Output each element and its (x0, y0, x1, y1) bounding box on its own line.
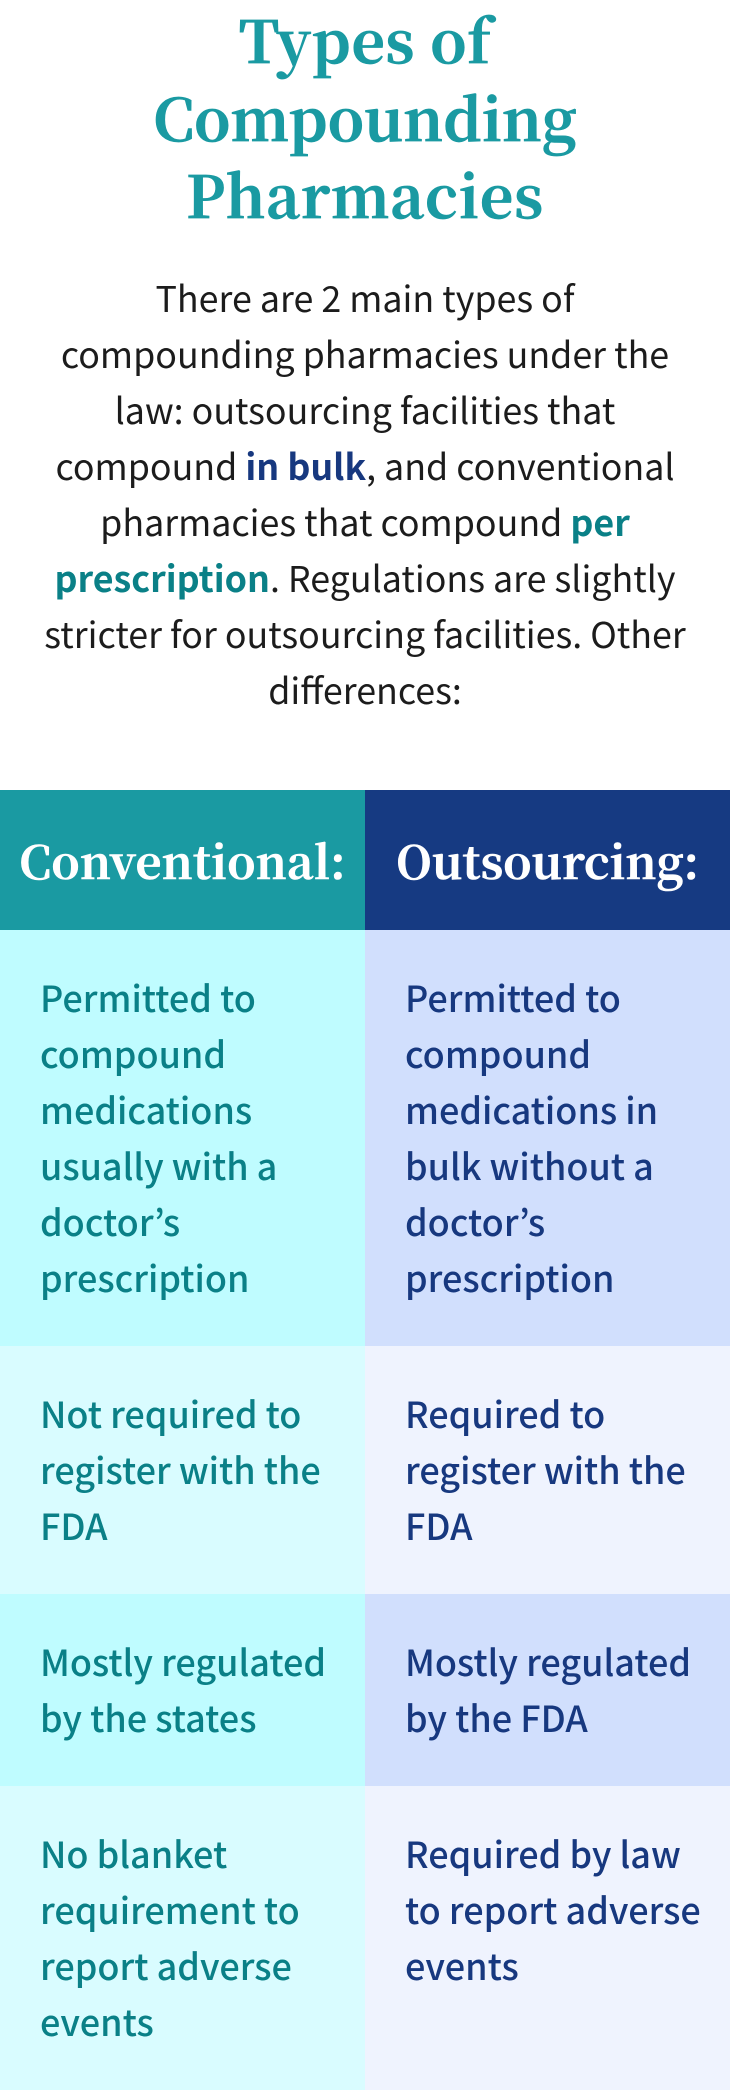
cell: conventional registration: FDA (40, 1499, 108, 1551)
cell: conventional permission (0, 930, 365, 1346)
cell: conventional regulation (0, 1594, 365, 1786)
intro text: differences: (268, 663, 462, 715)
cell: conventional registration (0, 1346, 365, 1594)
cell: outsourcing permission: compound (405, 1027, 591, 1079)
title: Pharmacies (186, 151, 544, 235)
cell: outsourcing adverse events: events (405, 1939, 519, 1991)
cell: outsourcing regulation (365, 1594, 730, 1786)
intro text: law: outsourcing facilities that (115, 383, 615, 435)
cell: outsourcing registration: Required to (405, 1387, 605, 1439)
cell: conventional permission: doctor’s (40, 1195, 180, 1247)
intro text: prescription. Regulations are slightly (54, 551, 676, 603)
cell: conventional regulation: by the states (40, 1691, 256, 1743)
cell: conventional adverse events: report adverse (40, 1939, 292, 1991)
cell: conventional adverse events: events (40, 1995, 154, 2047)
cell: conventional permission: prescription (40, 1251, 249, 1303)
cell: outsourcing permission (365, 930, 730, 1346)
cell: conventional adverse events: requirement to (40, 1883, 300, 1935)
header: conventional: Conventional: (19, 827, 346, 892)
header: outsourcing: Outsourcing: (396, 827, 699, 892)
cell: outsourcing registration: FDA (405, 1499, 473, 1551)
intro text: compound in bulk, and conventional (55, 439, 675, 491)
cell: conventional registration: register with the (40, 1443, 321, 1495)
cell: outsourcing permission: bulk without a (405, 1139, 654, 1191)
cell: outsourcing registration: register with the (405, 1443, 686, 1495)
cell: outsourcing permission: prescription (405, 1251, 614, 1303)
cell: outsourcing regulation: Mostly regulated (405, 1635, 691, 1687)
cell: conventional registration: Not required to (40, 1387, 301, 1439)
title: Compounding (153, 74, 577, 158)
cell: outsourcing registration (365, 1346, 730, 1594)
cell: conventional regulation: Mostly regulated (40, 1635, 326, 1687)
cell: conventional permission: usually with a (40, 1139, 277, 1191)
cell: outsourcing permission: Permitted to (405, 971, 621, 1023)
intro text (44, 271, 686, 715)
cell: outsourcing adverse events (365, 1786, 730, 2090)
intro text: compounding pharmacies under the (61, 327, 669, 379)
cell: outsourcing adverse events: to report adverse (405, 1883, 701, 1935)
cell: conventional permission: Permitted to (40, 971, 256, 1023)
header: outsourcing (365, 790, 730, 930)
cell: outsourcing permission: medications in (405, 1083, 658, 1135)
header: conventional (0, 790, 365, 930)
cell: conventional permission: compound (40, 1027, 226, 1079)
title (153, 0, 577, 235)
cell: conventional adverse events: No blanket (40, 1827, 227, 1879)
intro text: pharmacies that compound per (100, 495, 630, 547)
intro text: There are 2 main types of (155, 271, 574, 323)
intro text: stricter for outsourcing facilities. Other (44, 607, 686, 659)
cell: outsourcing adverse events: Required by law (405, 1827, 681, 1879)
cell: outsourcing permission: doctor’s (405, 1195, 545, 1247)
cell: conventional permission: medications (40, 1083, 252, 1135)
cell: conventional adverse events (0, 1786, 365, 2090)
cell: outsourcing regulation: by the FDA (405, 1691, 588, 1743)
